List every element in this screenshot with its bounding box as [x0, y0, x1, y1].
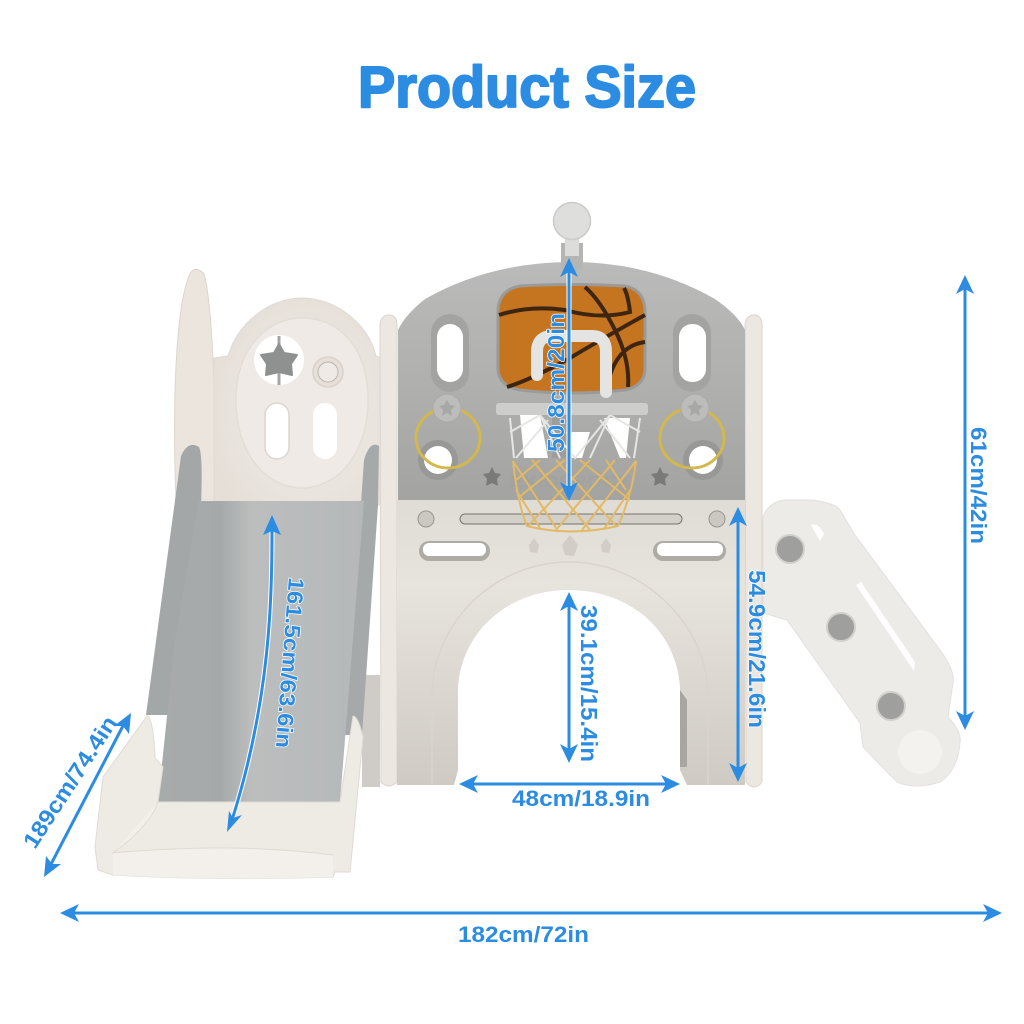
dimension: total width 182cm: 182cm/72in: [458, 922, 589, 947]
brand text: EKIDSROCK: [510, 472, 633, 491]
ring mount right: [681, 394, 709, 422]
dimension: 48cm: [459, 775, 680, 811]
dimension: 189cm depth: [18, 712, 131, 877]
dimension: 54.9cm: 54.9cm/21.6in: [744, 570, 770, 728]
basketball backboard: [498, 284, 645, 393]
dimension: 54.9cm: [729, 507, 770, 782]
lower arch panel: [397, 500, 745, 785]
slide: [95, 445, 380, 879]
dimension: total width 182cm: [60, 904, 1002, 947]
grey basketball board: [398, 262, 745, 500]
dimension: 161.5cm slide length: [227, 515, 309, 832]
product: playset illustration: [95, 202, 960, 879]
left curved side panel: [175, 269, 216, 500]
basketball net: [510, 415, 640, 532]
dimension: 48cm: 48cm/18.9in: [512, 786, 650, 811]
dimension: 161.5cm slide length: 161.5cm/63.6in: [271, 577, 309, 749]
dimension: height 61cm: 61cm/42in: [966, 427, 991, 544]
title: Product Size: [358, 55, 696, 120]
star climbing panel: [214, 298, 382, 505]
right post: [745, 315, 762, 787]
right ladder: [763, 500, 960, 786]
ring left: [416, 408, 480, 468]
dimension: 39.1cm: 39.1cm/15.4in: [576, 605, 602, 762]
left post: [380, 315, 397, 786]
dimension: 50.8cm: [543, 258, 578, 501]
white hook: [537, 336, 606, 392]
icon: stars: [483, 467, 669, 486]
rim plate: [496, 403, 648, 415]
dimension: height 61cm: [956, 275, 991, 730]
dimension: 39.1cm: [560, 592, 602, 763]
dimension: 50.8cm: 50.8cm/20in: [543, 313, 569, 452]
top knob: [554, 202, 590, 274]
ring right: [660, 408, 724, 468]
icon: star: [261, 344, 297, 375]
dimension: 189cm depth: 189cm/74.4in: [18, 712, 122, 853]
ring mount left: [433, 394, 461, 422]
